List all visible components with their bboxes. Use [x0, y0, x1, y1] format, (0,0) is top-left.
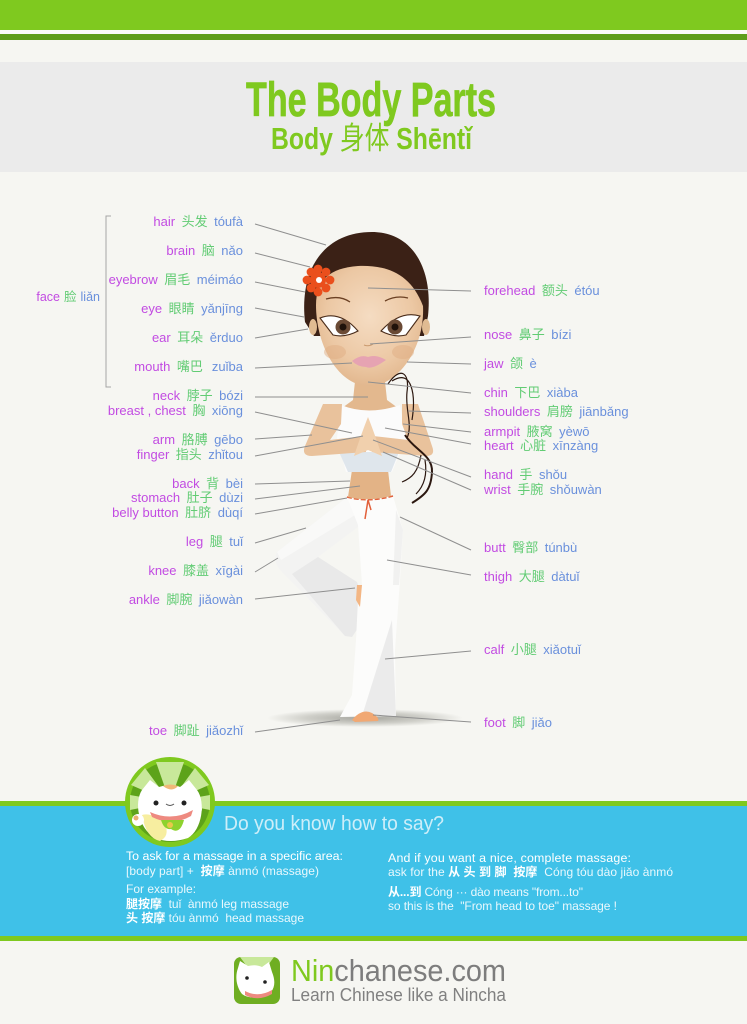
face [316, 266, 423, 386]
subtitle: Body 身体 Shēntǐ [271, 121, 473, 156]
nose and cheeks [324, 344, 414, 359]
leader lines [255, 224, 471, 732]
neck: neck 脖子 bózi [153, 388, 243, 403]
label: face: face 脸 liǎn [36, 290, 100, 304]
title: The Body Parts [246, 74, 496, 127]
hair: hair 头发 tóufà [153, 214, 244, 229]
waist ties [347, 496, 393, 519]
back: back 背 bèi [172, 476, 243, 491]
breast, chest: breast , chest 胸 xiōng [108, 403, 243, 418]
right text block: ask for the 从 头 到 脚 按摩 Cóng tóu dào jiǎo ànmó [388, 864, 673, 879]
figure: woman in tree pose [267, 232, 463, 727]
flower [303, 265, 334, 296]
left text block: 腿按摩 tuǐ ànmó leg massage [126, 896, 289, 911]
footer logo icon [234, 957, 280, 1004]
ears [309, 319, 430, 335]
left text block [126, 849, 343, 925]
face bracket [106, 216, 111, 387]
eyebrows [326, 297, 408, 302]
eyebrow: eyebrow 眉毛 méimáo [109, 272, 243, 287]
left text block: To ask for a massage in a specific area: [126, 849, 343, 863]
foot: foot 脚 jiǎo [484, 715, 552, 730]
right text block: And if you want a nice, complete massage: [388, 851, 631, 865]
left text block: 头 按摩 tóu ànmó head massage [126, 910, 304, 925]
neck [342, 372, 398, 413]
mouth [352, 356, 386, 368]
right text block [388, 851, 673, 913]
brain: brain 脑 nǎo [166, 243, 243, 258]
calf: calf 小腿 xiǎotuǐ [484, 642, 582, 657]
forehead: forehead 额头 étóu [484, 283, 600, 298]
wrist: wrist 手腕 shǒuwàn [483, 482, 602, 497]
footer brand name: Ninchanese.com [291, 953, 506, 988]
stomach: stomach 肚子 dùzi [131, 490, 243, 505]
left labels [108, 214, 244, 738]
floor shadow [267, 709, 463, 727]
armpit: armpit 腋窝 yèwō [484, 424, 590, 439]
right labels [483, 283, 629, 730]
ankle skin [356, 585, 362, 607]
butt: butt 臀部 túnbù [484, 540, 577, 555]
finger: finger 指头 zhǐtou [137, 447, 243, 462]
top [337, 405, 406, 472]
arms [304, 404, 433, 456]
eye: eye 眼睛 yǎnjīng [141, 301, 243, 316]
panel: do you know how to say [0, 757, 747, 941]
nose: nose 鼻子 bízi [484, 327, 572, 342]
panel heading: Do you know how to say? [224, 813, 444, 835]
heart: heart 心脏 xīnzàng [484, 438, 598, 453]
toe: toe 脚趾 jiǎozhǐ [149, 723, 244, 738]
leg: leg 腿 tuǐ [186, 534, 244, 549]
hand: hand 手 shǒu [484, 467, 567, 482]
belly button: belly button 肚脐 dùqí [112, 505, 243, 520]
eyes [320, 315, 420, 336]
ankle: ankle 脚腕 jiǎowàn [129, 592, 243, 607]
shoulders: shoulders 肩膀 jiānbǎng [484, 404, 629, 419]
ear: ear 耳朵 ěrduo [152, 330, 243, 345]
hair back [304, 232, 429, 336]
thigh: thigh 大腿 dàtuǐ [484, 569, 581, 584]
mascot badge: lucky cat [125, 757, 215, 847]
mouth: mouth 嘴巴 zuǐba [134, 359, 244, 374]
standing leg [340, 496, 403, 717]
title band [0, 62, 747, 172]
right text block: so this is the "From head to toe" massage ! [388, 899, 617, 913]
left text block: [body part] + 按摩 ànmó (massage) [126, 863, 319, 878]
top green band [0, 0, 747, 40]
ponytail strands [388, 373, 432, 503]
jaw: jaw 颌 è [483, 356, 537, 371]
right text block: 从...到 Cóng ··· dào means "from...to" [388, 885, 583, 899]
hands [354, 417, 382, 456]
knee: knee 膝盖 xīgài [148, 563, 243, 578]
left text block: For example: [126, 882, 196, 896]
foot [352, 712, 378, 722]
raised leg [275, 497, 368, 637]
footer tagline: Learn Chinese like a Nincha [291, 985, 507, 1005]
arm: arm 胳膊 gēbo [153, 432, 243, 447]
chin: chin 下巴 xiàba [484, 385, 579, 400]
midriff [348, 470, 391, 499]
